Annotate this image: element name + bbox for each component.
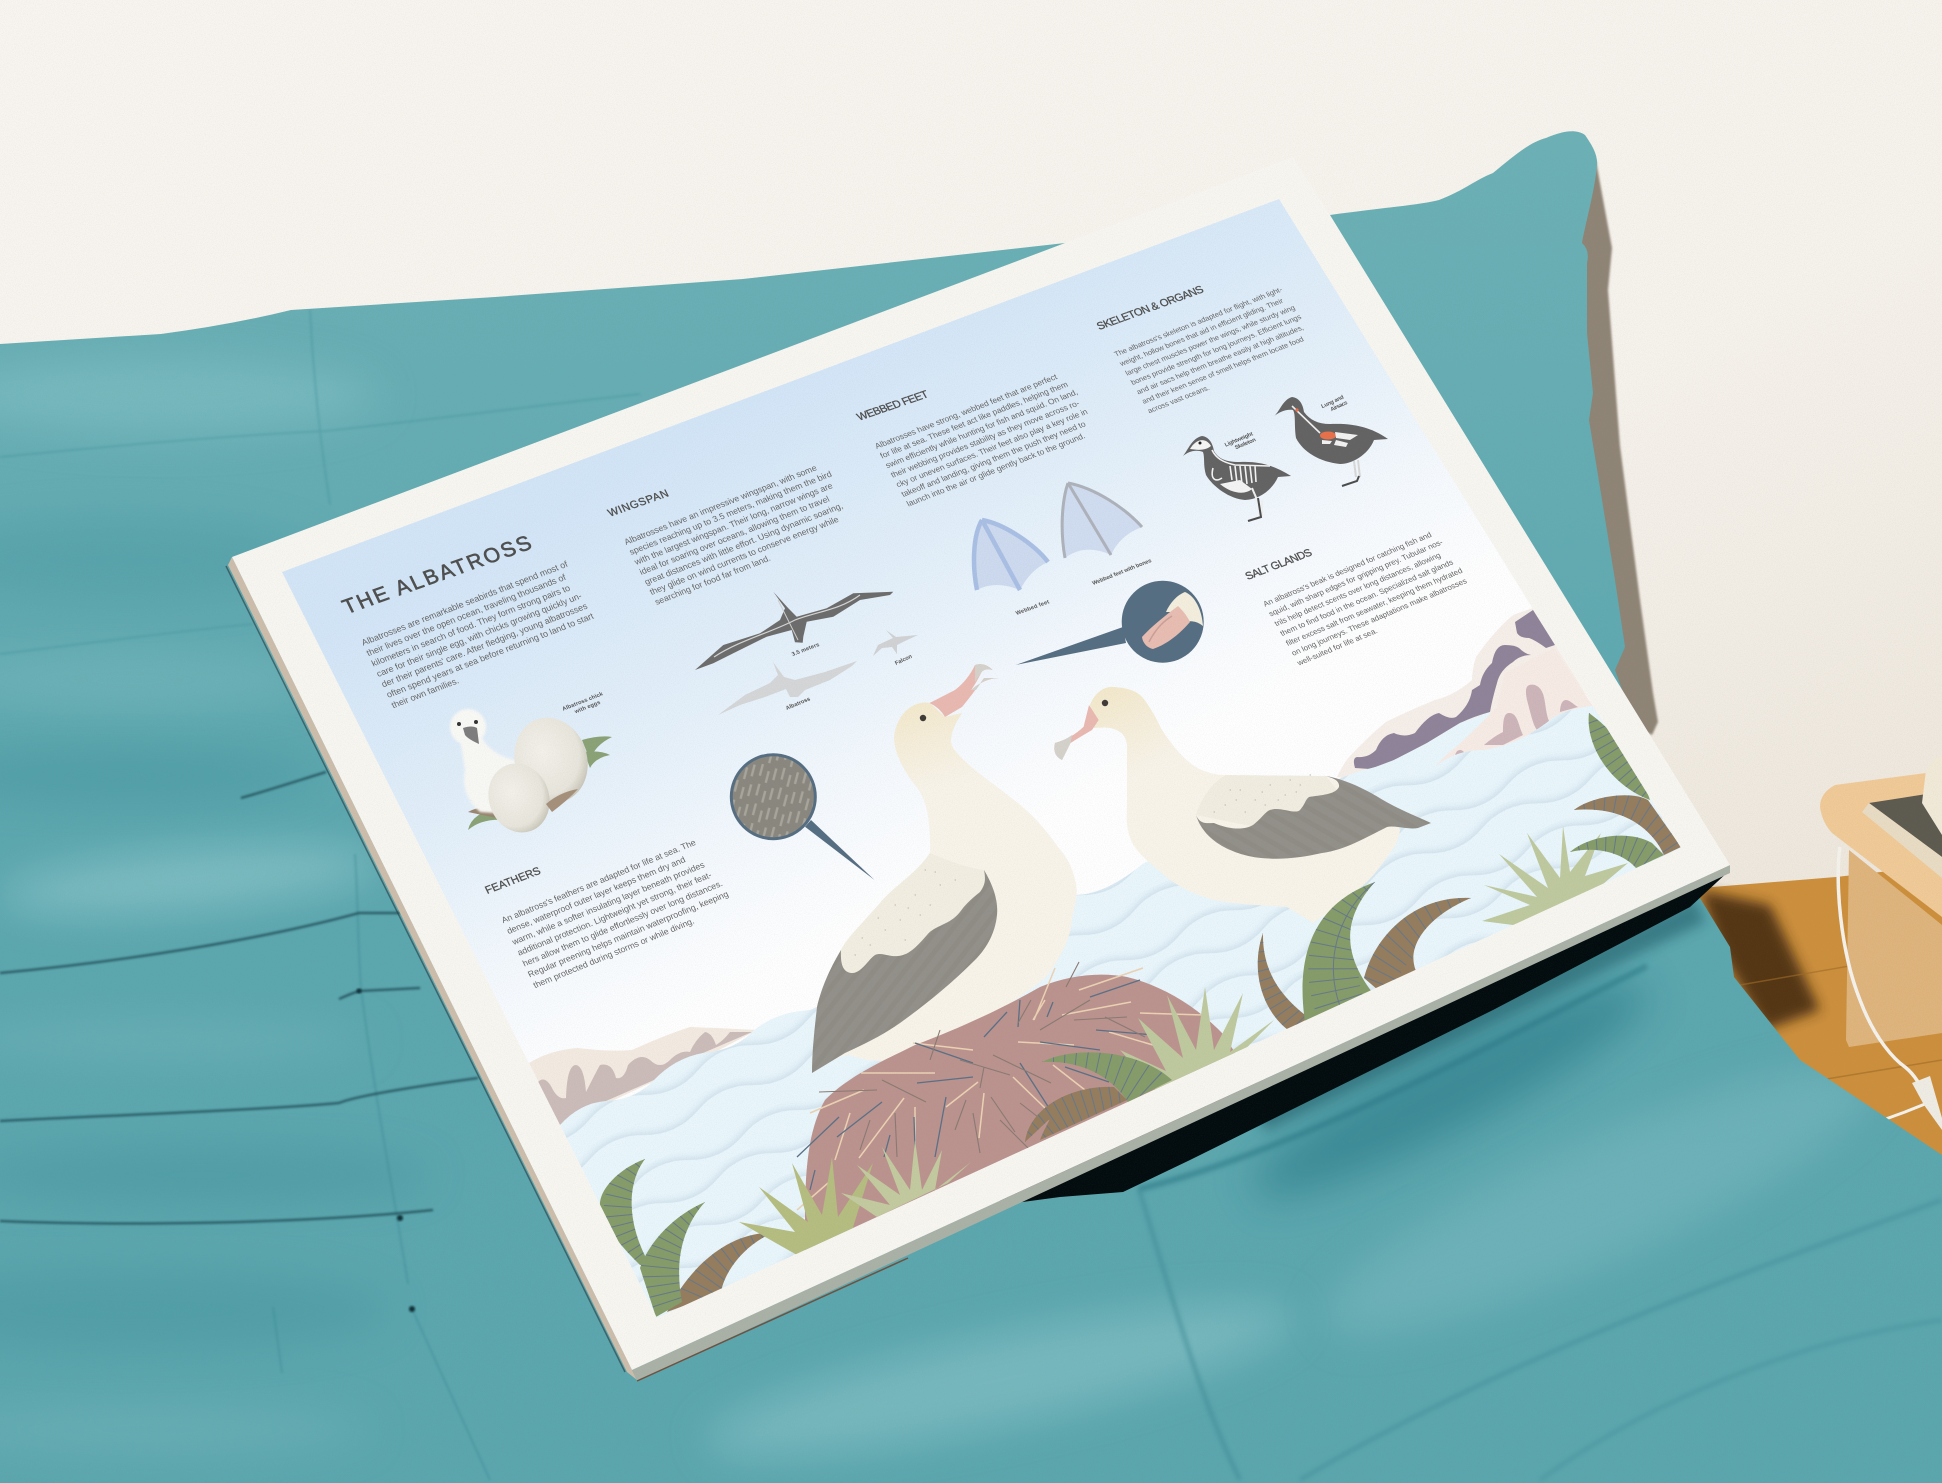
side table	[1820, 755, 1942, 1047]
poster paper	[282, 199, 1681, 1318]
leaf green	[1030, 1030, 1190, 1120]
text block: skeleton and organs: across vast oceans.	[1146, 383, 1211, 415]
label: lung and airsacs: Lung and	[1321, 394, 1345, 410]
text block: wingspan: they glide on wind currents to conserve energy while	[648, 514, 840, 597]
text block: intro: care for their single egg, with chicks growing quickly un-	[375, 591, 583, 679]
label: webbed feet with bones: Webbed feet with bones	[1092, 558, 1153, 587]
text block: feathers: them protected during storms or while diving.	[531, 916, 696, 990]
label: albatross: Albatross	[785, 696, 812, 712]
icon: albatross wingspan silhouette	[695, 592, 893, 670]
text block: feathers: dense, waterproof outer layer keeps them dry and	[505, 854, 687, 936]
text block: webbed feet: launch into the air or glide gently back to the ground.	[905, 432, 1087, 508]
text block: intro	[360, 558, 601, 710]
text block: skeleton and organs: large chest muscles power the wings, while sturdy wing	[1124, 303, 1297, 377]
nest twigs tan	[797, 968, 1203, 1210]
text block: webbed feet: takeoff and landing, giving them the push they need to	[900, 420, 1088, 499]
text block: intro: often spend years at sea before returning to land to start	[385, 611, 596, 700]
label: lightweight skeleton: Skeleton	[1234, 437, 1258, 451]
sea	[560, 706, 1681, 1318]
icon: comparison albatross silhouette	[718, 661, 857, 715]
text block: salt glands: them to find food in the ocean. Specialized salt glands	[1279, 558, 1455, 638]
icon: falcon silhouette	[873, 630, 918, 656]
star plant pale	[1482, 826, 1628, 925]
label: chick with eggs: Albatross chick	[562, 691, 605, 712]
heading: skeleton and organs: SKELETON & ORGANS	[1095, 284, 1206, 333]
nest twigs dark	[819, 962, 1145, 1157]
text block: feathers: additional protection. Lightweight yet strong, their feat-	[516, 870, 713, 958]
text block: wingspan	[621, 459, 859, 607]
egg small	[479, 755, 559, 841]
leaf brown	[1570, 785, 1685, 860]
heading: feathers: FEATHERS	[483, 865, 543, 897]
callout: beak close-up	[1016, 581, 1204, 665]
wing grey feathers	[812, 870, 997, 1073]
text block: salt glands: on long journeys. These adaptations make albatrosses	[1290, 576, 1469, 658]
wing grey feathers	[1196, 776, 1431, 859]
dark cracks	[0, 772, 478, 1223]
leaf brown	[1020, 1080, 1140, 1150]
left distant mountains	[529, 1027, 757, 1125]
leaf brown left	[1250, 925, 1320, 1035]
text block: webbed feet: Albatrosses have strong, webbed feet that are perfect	[873, 372, 1060, 451]
sofa highlights and creases	[0, 310, 1942, 1483]
seams	[0, 310, 640, 654]
leaf green left	[595, 1155, 655, 1270]
heading: salt glands: SALT GLANDS	[1243, 547, 1315, 583]
heading: webbed feet: WEBBED FEET	[855, 389, 931, 423]
text block: salt glands: filter excess salt from seawater, keeping them hydrated	[1284, 566, 1464, 648]
wing mottled patch	[841, 853, 985, 973]
speckles	[1214, 775, 1310, 812]
text block: salt glands: well-suited for life at sea.	[1295, 626, 1379, 668]
text block: salt glands: trils help detect scents over long distances, allowing	[1273, 551, 1442, 628]
text block: skeleton and organs	[1112, 284, 1320, 415]
scenery	[529, 608, 1681, 1318]
beak	[930, 664, 999, 717]
poster frame	[226, 157, 1730, 1381]
bottom-left plants	[595, 1140, 971, 1320]
white cable and plug	[1838, 847, 1942, 1130]
left albatross	[812, 664, 1077, 1073]
text block: intro: their lives over the open ocean, traveling thousands of	[365, 572, 568, 658]
label: 3.5 meters: 3.5 meters	[791, 642, 821, 658]
bottom-centre plants	[1020, 875, 1480, 1150]
text block: feathers: An albatross's feathers are adapted for life at sea. The	[500, 837, 698, 925]
text block: salt glands	[1261, 527, 1475, 668]
star plant pale	[841, 1140, 971, 1217]
text block: wingspan: great distances with little effort. Using dynamic soaring,	[643, 501, 845, 587]
wooden floor	[1640, 865, 1942, 1483]
text block: webbed feet: cky or uneven surfaces. Their feet also play a key role in	[895, 407, 1090, 489]
speckles	[855, 870, 956, 955]
title: THE ALBATROSS	[339, 532, 535, 619]
text block: wingspan: Albatrosses have an impressive wingspan, with some	[622, 463, 819, 547]
icon: skeleton bird	[1183, 436, 1291, 521]
star plant olive	[739, 1157, 873, 1255]
black gap under poster	[1000, 870, 1730, 1205]
heading: wingspan: WINGSPAN	[606, 488, 671, 519]
text block: skeleton and organs: The albatross's skeleton is adapted for flight, with light-	[1112, 285, 1284, 358]
text block: wingspan: species reaching up to 3.5 meters, making them the bird	[627, 469, 834, 557]
text block: intro: kilometers in search of food. They form strong pairs to	[370, 583, 572, 668]
text block: intro: Albatrosses are remarkable seabirds that spend most of	[360, 559, 570, 648]
wave layers	[564, 706, 1681, 1316]
label: falcon: Falcon	[894, 654, 914, 667]
text block: skeleton and organs: bones provide strength for long journeys. Efficient lungs	[1129, 312, 1303, 387]
beak	[1054, 705, 1099, 760]
wall background	[0, 0, 1942, 1000]
text block: feathers	[499, 835, 735, 990]
leaf green tall	[1290, 875, 1380, 1025]
nest twigs blue	[797, 980, 1154, 1190]
text block: feathers: hers allow them to glide effortlessly over long distances.	[521, 878, 724, 968]
star plant pale	[1120, 987, 1274, 1105]
leaf brown right	[1360, 890, 1480, 995]
text block: feathers: Regular preening helps maintain waterproofing, keeping	[526, 889, 730, 979]
egg large	[503, 708, 599, 812]
text block: webbed feet: their webbing provides stability as they move across ro-	[889, 399, 1081, 480]
leaf green upright	[1580, 705, 1660, 805]
bottom-right plants	[1482, 705, 1685, 925]
icon: webbed foot with bones	[1061, 483, 1142, 558]
text block: wingspan: searching for food far from land.	[653, 553, 772, 607]
text block: feathers: warm, while a softer insulating layer beneath provides	[509, 859, 707, 947]
nest	[797, 962, 1250, 1290]
nest grass	[582, 736, 612, 768]
label: lung and airsacs: Airsacs	[1330, 400, 1349, 413]
text block: webbed feet: swim efficiently while hunting for fish and squid. On land,	[884, 388, 1079, 470]
text block: intro: der their parents' care. After fledging, young albatrosses	[380, 601, 590, 689]
text block: skeleton and organs: weight, hollow bones that aid in efficient gliding. Their	[1117, 296, 1285, 368]
icon: albatross chick with eggs	[450, 708, 612, 841]
text block: wingspan: with the largest wingspan. Their long, narrow wings are	[632, 481, 834, 567]
right albatross	[1054, 687, 1431, 923]
text block: salt glands: squid, with sharp edges for gripping prey. Tubular nos-	[1267, 538, 1445, 618]
text block: skeleton and organs: and air sacs help them breathe easily at high altitudes,	[1135, 323, 1305, 396]
egg shadow twigs	[546, 789, 578, 812]
text block: webbed feet	[873, 369, 1101, 508]
text block: skeleton and organs: and their keen sense of smell helps them locate food	[1140, 335, 1305, 406]
text block: salt glands: An albatross's beak is designed for catching fish and	[1262, 530, 1433, 608]
text block: intro: their own families.	[390, 676, 460, 710]
chick	[450, 709, 520, 815]
text block: wingspan: ideal for soaring over oceans, allowing them to travel	[638, 494, 831, 577]
wing mottled patch	[1196, 775, 1336, 826]
poster artwork	[282, 199, 1681, 1318]
callout: feather close-up	[731, 755, 874, 880]
icon: organs bird	[1273, 397, 1388, 486]
right distant mountains	[1337, 608, 1600, 790]
icon: webbed foot	[973, 520, 1048, 590]
label: chick with eggs: with eggs	[573, 700, 602, 716]
label: lightweight skeleton: Lightweight	[1224, 431, 1254, 448]
leaf green right	[635, 1198, 710, 1320]
label: webbed feet: Webbed feet	[1015, 599, 1051, 617]
text block: webbed feet: for life at sea. These feet act like paddles, helping them	[879, 380, 1070, 460]
leaf green	[1565, 825, 1670, 875]
leaf brown	[660, 1225, 780, 1320]
pillow shadow on wall	[1540, 160, 1658, 735]
